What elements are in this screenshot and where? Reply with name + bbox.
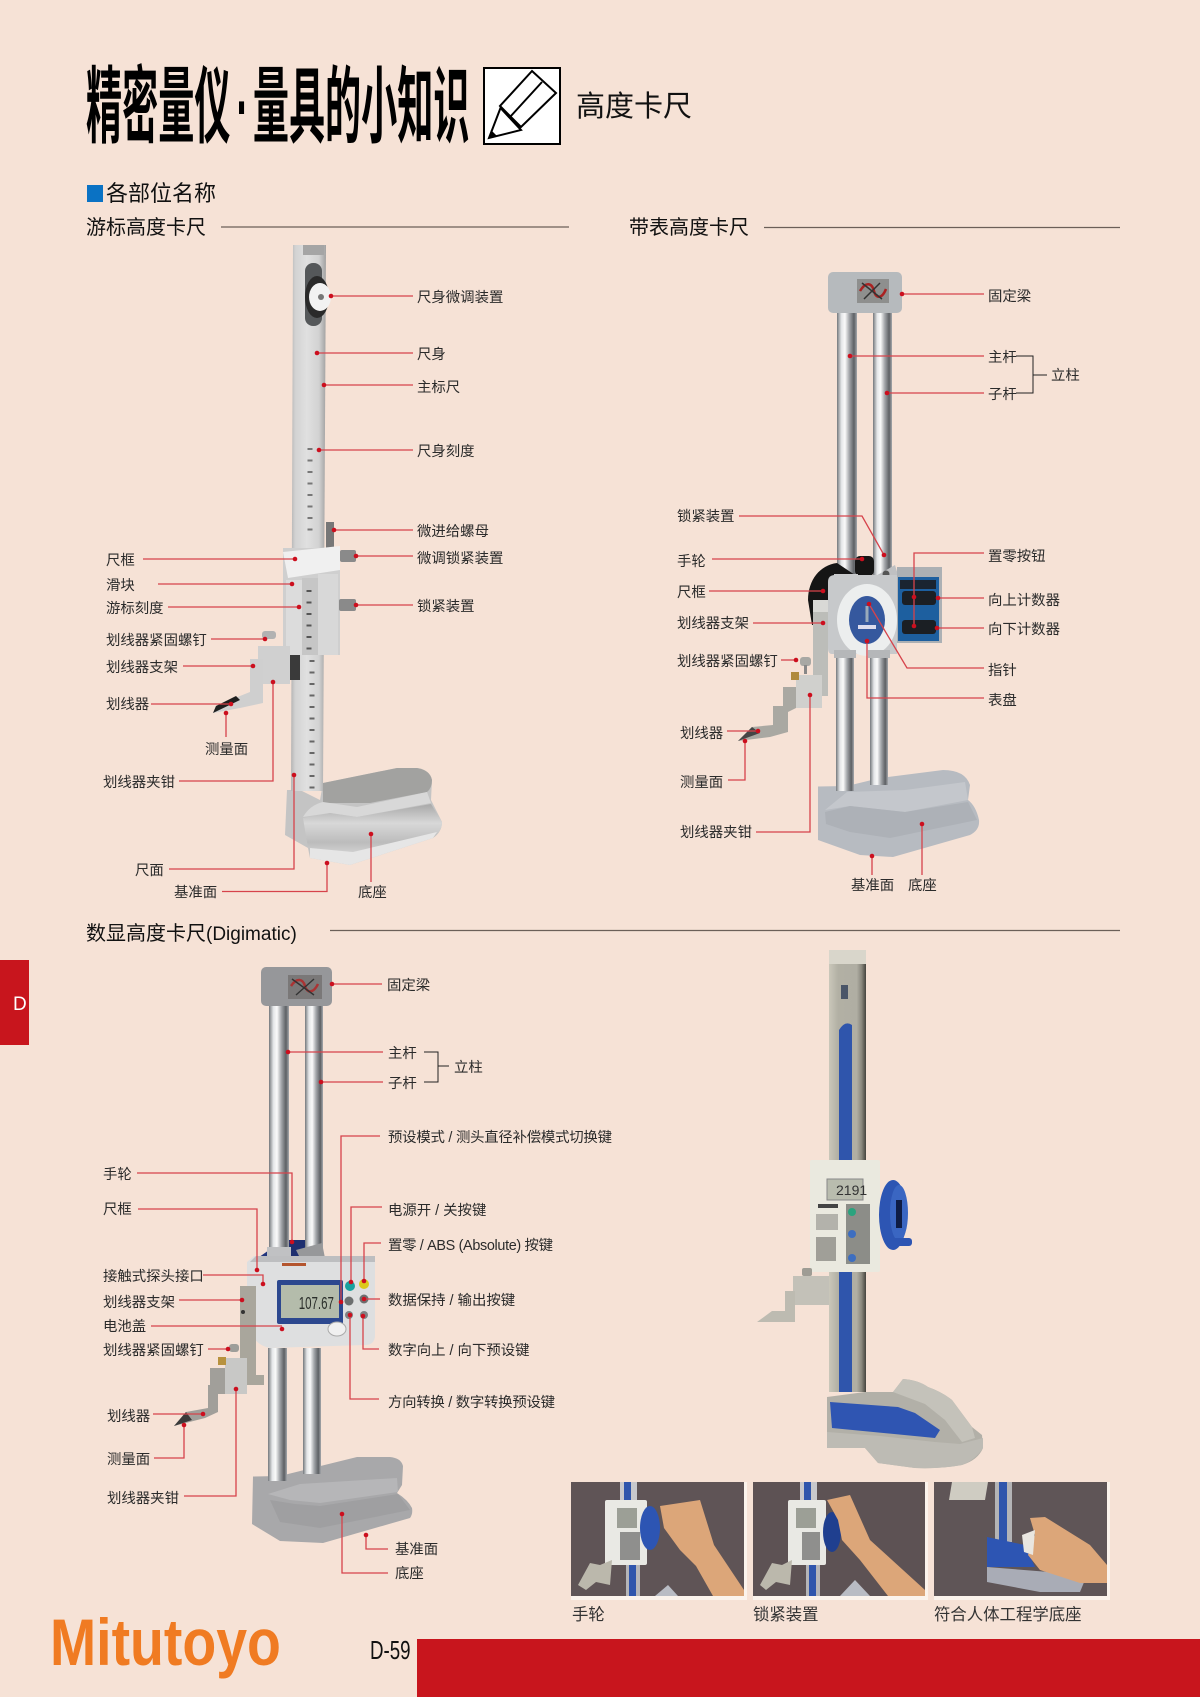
label: 锁紧装置 — [677, 508, 886, 557]
label: 底座: 底座 — [908, 877, 937, 894]
label: 手轮 — [103, 1166, 294, 1244]
label group: 立柱 (主杆 / 子杆): 子杆 — [388, 1075, 417, 1092]
label: 划线器支架: 划线器支架 — [106, 659, 178, 676]
label: 划线器紧固螺钉: 划线器紧固螺钉 — [103, 1342, 204, 1359]
label: 指针 — [867, 602, 1017, 679]
label: 预设模式 / 测头直径补偿模式切换键: 预设模式 / 测头直径补偿模式切换键 — [388, 1129, 612, 1146]
panel: dial height gauge — [677, 272, 1080, 894]
label: 划线器 — [106, 696, 233, 713]
label: 尺面 — [135, 773, 296, 879]
icon: pencil in box — [484, 68, 560, 144]
label: 划线器支架: 划线器支架 — [103, 1294, 175, 1311]
side tab D: D — [13, 994, 27, 1015]
label: 划线器夹钳 — [107, 1387, 238, 1507]
label: 测量面: 测量面 — [680, 774, 723, 791]
label: 尺框 — [103, 1201, 259, 1272]
label group: 立柱 (主杆 / 子杆): 子杆 — [988, 386, 1017, 403]
title: 量具的小知识 — [253, 59, 470, 154]
label: 尺框: 尺框 — [106, 552, 135, 569]
label: 接触式探头接口: 接触式探头接口 — [103, 1268, 204, 1285]
label: 划线器夹钳 — [103, 680, 275, 791]
page number: D-59 — [370, 1635, 411, 1665]
label: 划线器: 划线器 — [680, 725, 723, 742]
label: 固定梁 — [330, 977, 430, 994]
label: 电源开 / 关按键: 电源开 / 关按键 — [388, 1202, 486, 1219]
label: 置零按钮 — [912, 548, 1046, 628]
label: 划线器支架: 划线器支架 — [677, 615, 749, 632]
heading: digimatic height gauge: 数显高度卡尺(Digimatic) — [86, 922, 297, 945]
label: 锁紧装置: 锁紧装置 — [677, 508, 735, 525]
logo: Mitutoyo: Mitutoyo — [50, 1605, 281, 1679]
label: 手轮: 手轮 — [677, 553, 706, 570]
label: 划线器: 划线器 — [106, 696, 149, 713]
product image: digital height gauge with blue wheel — [757, 950, 983, 1468]
illustration: dial gauge — [738, 272, 979, 857]
illustration: vernier gauge — [213, 245, 442, 865]
label: 测量面: 测量面 — [205, 741, 248, 758]
label: 数字向上 / 向下预设键: 数字向上 / 向下预设键 — [388, 1342, 530, 1359]
label: 主标尺: 主标尺 — [417, 379, 460, 396]
label: 电池盖 — [103, 1318, 284, 1335]
subtitle: 高度卡尺 — [576, 90, 692, 123]
label: 测量面: 测量面 — [107, 1451, 150, 1468]
title: · — [237, 59, 249, 154]
label: 向下计数器: 向下计数器 — [988, 621, 1060, 638]
label group: 立柱 (主杆 / 子杆): 主杆 — [388, 1045, 417, 1062]
label: 微调锁紧装置 — [354, 550, 503, 567]
label: 划线器支架 — [677, 615, 825, 632]
caption: 符合人体工程学底座: 符合人体工程学底座 — [934, 1606, 1082, 1624]
label group: 立柱 (主杆 / 子杆): 立柱 — [454, 1059, 483, 1076]
label: 划线器夹钳: 划线器夹钳 — [103, 774, 175, 791]
label: 尺身 — [315, 346, 446, 363]
footer red bar — [417, 1639, 1200, 1697]
label: 尺身微调装置 — [329, 289, 503, 306]
label: 划线器支架 — [106, 659, 255, 676]
label: 电池盖: 电池盖 — [103, 1318, 146, 1335]
label: 指针: 指针 — [988, 662, 1017, 679]
label: 锁紧装置: 锁紧装置 — [417, 598, 475, 615]
label: 方向转换 / 数字转换预设键: 方向转换 / 数字转换预设键 — [388, 1394, 555, 1411]
label: 预设模式 / 测头直径补偿模式切换键 — [339, 1129, 612, 1304]
label: 划线器: 划线器 — [107, 1408, 150, 1425]
illustration: digital gauge — [174, 967, 412, 1543]
label group: 立柱 (主杆 / 子杆) — [286, 1045, 483, 1092]
label: 尺面: 尺面 — [135, 862, 164, 879]
label: 数据保持 / 输出按键: 数据保持 / 输出按键 — [388, 1292, 515, 1309]
photo: 符合人体工程学底座 — [934, 1482, 1110, 1600]
label: 划线器夹钳: 划线器夹钳 — [107, 1490, 179, 1507]
label: 微进给螺母: 微进给螺母 — [417, 523, 489, 540]
label group: 立柱 (主杆 / 子杆): 立柱 — [1051, 367, 1080, 384]
title: 精密量仪 — [86, 59, 230, 154]
label: 尺身微调装置: 尺身微调装置 — [417, 289, 503, 306]
caption: 锁紧装置: 锁紧装置 — [753, 1606, 819, 1624]
label: 测量面 — [680, 739, 747, 791]
label: 基准面 — [364, 1533, 438, 1558]
caption: 手轮: 手轮 — [572, 1606, 605, 1624]
label: 表盘: 表盘 — [988, 691, 1017, 709]
product image: digital height gauge with blue wheel: 2191 — [836, 1182, 867, 1198]
label: 划线器夹钳 — [680, 693, 812, 841]
label: 向上计数器 — [936, 592, 1060, 609]
label: 置零按钮: 置零按钮 — [988, 548, 1046, 565]
label: 划线器紧固螺钉: 划线器紧固螺钉 — [106, 632, 207, 649]
label: 尺身: 尺身 — [417, 346, 446, 363]
label: 基准面 — [174, 861, 329, 901]
label: 固定梁: 固定梁 — [988, 288, 1031, 305]
label: 底座 — [908, 822, 937, 894]
label: 划线器支架 — [103, 1294, 244, 1311]
label: 底座: 底座 — [358, 884, 387, 901]
label: 游标刻度: 游标刻度 — [106, 600, 164, 617]
label: 滑块 — [106, 577, 294, 594]
heading: dial height gauge: 带表高度卡尺 — [629, 216, 749, 239]
label: 基准面: 基准面 — [851, 877, 894, 894]
label: 基准面: 基准面 — [174, 884, 217, 901]
label: 数字向上 / 向下预设键 — [361, 1314, 530, 1359]
label: 微进给螺母 — [332, 523, 489, 540]
label: 测量面 — [107, 1423, 186, 1468]
label: 微调锁紧装置: 微调锁紧装置 — [417, 550, 503, 567]
label: 划线器紧固螺钉: 划线器紧固螺钉 — [677, 653, 778, 670]
label: 锁紧装置 — [354, 598, 475, 615]
label: 尺框: 尺框 — [103, 1201, 132, 1218]
label: 划线器 — [107, 1408, 205, 1425]
label: 固定梁: 固定梁 — [387, 977, 430, 994]
label: 划线器紧固螺钉 — [106, 632, 267, 649]
label: 底座 — [340, 1512, 424, 1582]
label: 底座: 底座 — [395, 1565, 424, 1582]
label: 尺身刻度 — [317, 443, 475, 460]
label: 置零 / ABS (Absolute) 按键 — [362, 1237, 553, 1283]
label: 测量面 — [205, 711, 248, 758]
label: 底座 — [358, 832, 387, 901]
label: 主标尺 — [322, 379, 460, 396]
label: 电源开 / 关按键 — [349, 1202, 486, 1284]
label: 划线器夹钳: 划线器夹钳 — [680, 824, 752, 841]
label: 基准面 — [851, 854, 894, 894]
photo: 手轮 — [571, 1482, 747, 1600]
label: 划线器 — [680, 725, 760, 742]
label: 向上计数器: 向上计数器 — [988, 592, 1060, 609]
label: 置零 / ABS (Absolute) 按键: 置零 / ABS (Absolute) 按键 — [388, 1237, 553, 1254]
label: 尺框: 尺框 — [677, 584, 706, 601]
label group: 立柱 (主杆 / 子杆): 主杆 — [988, 349, 1017, 366]
label: 方向转换 / 数字转换预设键 — [348, 1313, 555, 1411]
label: 表盘 — [865, 639, 1017, 709]
illustration: digital gauge: 107.67 — [299, 1294, 334, 1314]
photo: 锁紧装置 — [753, 1482, 928, 1600]
label: 基准面: 基准面 — [395, 1541, 438, 1558]
label: 手轮: 手轮 — [103, 1166, 132, 1183]
label: 手轮 — [677, 553, 864, 570]
side tab D — [0, 960, 29, 1045]
label: 尺身刻度: 尺身刻度 — [417, 443, 475, 460]
label: 尺框 — [677, 584, 825, 601]
label: 接触式探头接口 — [103, 1268, 265, 1286]
label: 滑块: 滑块 — [106, 577, 135, 594]
label group: 立柱 (主杆 / 子杆) — [848, 349, 1080, 403]
label: 固定梁 — [900, 288, 1031, 305]
label: 尺框 — [106, 552, 297, 569]
panel: digimatic height gauge — [103, 967, 612, 1582]
section heading: part names: 各部位名称 — [106, 181, 216, 206]
heading: vernier height gauge: 游标高度卡尺 — [86, 216, 206, 239]
panel: vernier height gauge — [103, 245, 503, 901]
label: 向下计数器 — [935, 621, 1060, 638]
label: 游标刻度 — [106, 600, 301, 617]
